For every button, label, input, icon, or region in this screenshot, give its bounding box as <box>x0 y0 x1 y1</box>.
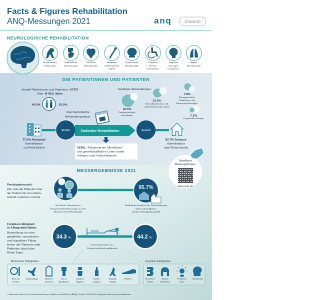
chart: treatment bubbles: 7.1% <box>190 114 197 118</box>
panel: QR code bubble: Detaillierte <box>179 159 192 163</box>
text: score caption: Punkten bei Eintritt und Austritt <box>87 247 117 250</box>
panel: motor skills: Hygiene <box>76 282 85 284</box>
chart: gender split <box>32 98 68 110</box>
chart: treatment bubbles: 7.8% <box>184 92 191 96</box>
caption row: conditions: Entzündliche <box>65 61 78 64</box>
text: average duration <box>65 110 91 118</box>
panel: cognitive skills: Gedächtnis <box>192 278 203 280</box>
chart: treatment bubbles: Krankheiten und <box>179 99 196 102</box>
text: result captions: wurden mit festgelegt gestellt <box>132 211 161 214</box>
chart: gender split: 46.5% <box>32 102 41 106</box>
text: participation goal: der Patient bis zum Reha- <box>7 191 42 195</box>
panel: cognitive skills <box>129 251 205 285</box>
panel: QR code bubble <box>169 148 204 188</box>
text: common treatments: Häufigste Behandlungen: <box>118 87 152 91</box>
node: Eintritt: Eintritt <box>62 128 70 132</box>
text: entry source: 77.5% Akutspital <box>23 138 46 142</box>
arrow: stationary rehabilitation: Stationäre Rehabilitation <box>81 129 119 133</box>
text: functional ability: und kognitiven Fähig- <box>7 239 37 243</box>
panel: motor skills: wegung <box>93 282 101 284</box>
caption row: conditions: Erkrankungen <box>125 64 140 67</box>
heading: neurologische Rehabilitation: NEUROLOGISCHE REHABILITATION <box>7 35 89 40</box>
text: average duration: Durchschnittliche <box>67 110 90 114</box>
arrow: score improvement <box>76 235 134 238</box>
panel: motor skills: steigen <box>109 280 117 284</box>
heading: cognitive skills: Kognitive Fähigkeiten <box>145 259 171 263</box>
text: score caption <box>87 244 117 250</box>
panel: motor skills: Essen & <box>12 278 20 280</box>
arrow: down <box>103 137 109 143</box>
node: 44.2: 44.2 Pt. <box>137 234 153 240</box>
caption row: conditions: Periphere <box>148 61 159 64</box>
chart: gender split: 53.5% <box>59 102 68 106</box>
icon: house <box>171 123 183 136</box>
node: Eintritt <box>55 120 76 140</box>
text: result captions <box>50 204 168 214</box>
arrow: participation <box>77 189 134 191</box>
chart: treatment bubbles: Neurodegenerative und <box>145 102 169 106</box>
node: 95.7%: 95.7% <box>139 185 154 191</box>
text: total patients: Anzahl Patientinnen und Patienten: 14'757 <box>22 87 79 91</box>
text: participation goal: Austritt erreichen möchte <box>7 195 41 199</box>
caption row: conditions: Krankheiten <box>168 68 180 71</box>
text: exit destination: Aufenthaltsort <box>167 142 185 146</box>
logo: Charité <box>180 17 206 26</box>
icon: brain <box>7 42 39 74</box>
title: ANQ-Messungen 2021 <box>7 17 91 26</box>
chart: treatment bubbles: Lungenerkrankungen <box>183 117 205 120</box>
node: participants icon <box>53 176 78 201</box>
callout: ZEBIL: und gesellschaftlichen Leben sowie <box>77 149 125 153</box>
chart: treatment bubbles <box>118 83 205 120</box>
chart: treatment bubbles: demyelinisierende Leiden <box>144 106 170 109</box>
text: entry source: vor Reha-Eintritt <box>24 146 45 150</box>
text: result captions: (teils) und bei Aktiven <box>136 207 157 210</box>
panel: motor skills: Auskleiden <box>59 280 70 284</box>
panel: cognitive skills: lösen <box>180 282 185 284</box>
icon: calendar <box>95 111 109 124</box>
logo: ANQ: anq <box>154 16 172 26</box>
chart: treatment bubbles: Extrapyramidale <box>179 96 196 99</box>
panel: patients background <box>0 73 212 165</box>
text: functional ability: Funktionsfähigkeit <box>7 222 35 226</box>
node: 34.3 <box>52 224 78 250</box>
caption row: conditions: Erkrankungen <box>187 64 202 67</box>
panel: motor skills: Körperpflege <box>26 278 39 280</box>
text: participation goal: Ziel, das die Patientin oder <box>7 187 43 191</box>
logo: Charité: CHARITÉ <box>185 19 201 24</box>
panel: motor skills: Toiletten- <box>76 278 85 280</box>
title <box>7 6 128 26</box>
text: participation goal: Partizipationsziel: <box>7 182 33 186</box>
caption row: conditions: Verletzungen <box>44 64 57 67</box>
icons: conditions <box>42 45 202 61</box>
icon: building <box>27 123 41 136</box>
text: exit destination <box>164 138 188 150</box>
text: average duration: Behandlungsdauer <box>65 114 91 118</box>
panel: motor skills <box>8 250 139 285</box>
heading: patients: DIE PATIENTINNEN UND PATIENTEN <box>62 77 150 82</box>
panel: motor skills: Duschen <box>45 282 54 284</box>
node: 95.7% <box>133 178 161 203</box>
caption row: conditions: und Neoplasien <box>104 65 120 67</box>
panel: results background <box>0 165 212 300</box>
text: total patients <box>22 87 79 96</box>
panel: motor skills: Trinken <box>12 280 20 284</box>
chart: treatment bubbles: 13.1% <box>152 99 161 103</box>
icons: condition glyphs <box>46 47 198 59</box>
text: result captions: Bei Austritt: Erreichen der Zielvereinbarung <box>125 204 168 207</box>
node: 44.2 <box>132 224 158 250</box>
caption row: conditions: Gehirn <box>109 68 116 71</box>
text: result captions: Bei Eintritt: Teilnahme bei <box>56 204 81 207</box>
panel: motor skills: An- & <box>61 278 67 280</box>
caption row: conditions <box>43 61 202 71</box>
footer: © Nationaler Verein für Qualitätsentwicklung in Spitälern und Kliniken (ANQ) | Stand: 01.01.2023 | Infografik: www.anq.ch/rehabilitation <box>7 293 132 296</box>
caption row: conditions: Degenerative <box>125 61 139 64</box>
title: Facts & Figures Rehabilitation <box>7 6 128 16</box>
text: functional ability: in Alltagsaktivitäten: <box>7 226 37 230</box>
caption row: conditions: Erkrankungen <box>64 64 79 67</box>
chart: treatment bubbles: 49.5% <box>123 107 132 111</box>
caption row: conditions: Rückenmarks- <box>43 61 57 64</box>
caption row: conditions: Begleit- <box>190 61 198 64</box>
text: exit destination: nach Reha-Austritt <box>164 146 188 150</box>
caption row: conditions: Störungen <box>168 64 179 67</box>
callout: ZEBIL <box>75 144 138 160</box>
heading: motor skills: Motorische Fähigkeiten <box>11 259 39 263</box>
heading: results: MESSERGEBNISSE 2021 <box>77 168 136 173</box>
chart: treatment bubbles: Zerebrovaskuläre <box>118 111 136 114</box>
text: functional ability: Patienten durch das <box>7 247 35 251</box>
text: functional ability <box>7 222 41 255</box>
arrow: entry <box>42 129 58 131</box>
panel: motor skills: Transfer <box>124 278 132 280</box>
text: total patients: Alter: Ø 66,5 Jahre <box>37 92 63 96</box>
panel: motor skills: Fortbe- <box>93 278 100 280</box>
text: score caption: Durchschnittswerte von <box>91 244 114 247</box>
text: entry source: Aufenthaltsort <box>25 142 43 146</box>
panel: cognitive skills: Probleme <box>178 278 187 280</box>
panel: motor skills: Baden & <box>45 278 54 280</box>
chart: treatment bubbles: Bewegungsstörungen <box>176 102 198 105</box>
text: functional ability: gewählten motorischen <box>7 235 39 239</box>
panel: QR code bubble: www.anq.ch <box>178 184 193 188</box>
node: 34.3: 34.3 Pt. <box>56 234 72 240</box>
panel: cognitive skills: Verstehen/ <box>145 278 155 280</box>
text: result captions: Messliste (Ort: Reha-Austritt) <box>54 211 82 214</box>
node: Austritt <box>136 120 156 140</box>
callout: ZEBIL: ZEBIL: Teilnahme am öffentlichen <box>77 145 123 149</box>
text: functional ability: keiten der Patientin oder <box>7 243 41 247</box>
caption row: conditions: Kognitive <box>169 61 179 64</box>
chart: treatment bubbles: Krankheiten <box>121 114 134 117</box>
arrow: exit <box>156 129 169 131</box>
panel: cognitive skills: Reden <box>147 282 154 284</box>
caption row: conditions: Vaskuläre <box>86 61 97 64</box>
panel: cognitive skills: Interaktion <box>160 280 171 284</box>
text: result captions: entsprechenden Messungen aus der <box>50 207 86 210</box>
node: Austritt: Austritt <box>142 128 151 132</box>
callout: ZEBIL: Anliegen oder Aufenthaltsorte <box>77 153 117 157</box>
arrow: stationary rehabilitation <box>75 125 136 136</box>
caption row: conditions: Erkrankungen <box>84 64 99 67</box>
panel: cognitive skills: Soziale <box>162 278 169 280</box>
text: participation goal <box>7 182 43 199</box>
text: functional ability: Beurteilung von aus- <box>7 231 35 235</box>
caption row: conditions: Krankheiten <box>147 68 160 71</box>
panel: motor skills: Treppen- <box>109 278 117 280</box>
caption row: conditions: Blutungen <box>107 61 118 64</box>
icon: bed <box>87 228 119 235</box>
text: exit destination: 82.7% Zuhause <box>166 138 187 142</box>
panel: QR code bubble: Messergebnisse: <box>175 162 196 166</box>
text: entry source <box>23 138 46 150</box>
text: functional ability: Reha-Team <box>7 251 23 255</box>
caption row: conditions: Nerven- <box>149 64 157 67</box>
